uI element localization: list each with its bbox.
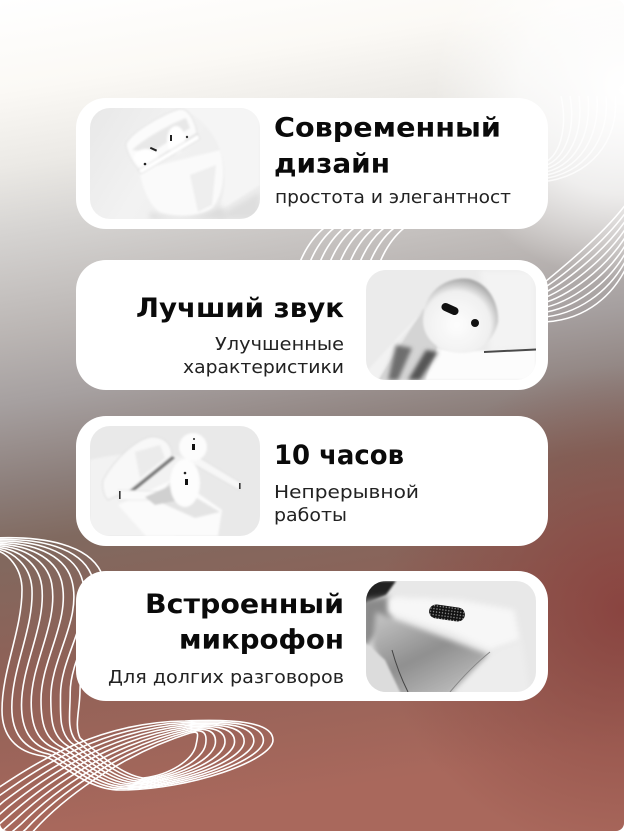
- subtitle: Для долгих разговоров: [108, 667, 344, 688]
- card background: [76, 260, 548, 390]
- photo: open case with earbuds: [90, 108, 260, 219]
- subtitle: Непрерывной: [274, 482, 419, 503]
- photo: earbud close-up: [366, 270, 536, 380]
- subtitle: [276, 484, 418, 524]
- subtitle: Улучшенные: [215, 334, 344, 355]
- subtitle: характеристики: [183, 357, 344, 378]
- panel: built-in microphone: [76, 571, 548, 701]
- heading: Современный: [274, 112, 501, 144]
- panel: modern design: [76, 98, 548, 229]
- heading: Встроенный: [145, 589, 344, 620]
- subtitle: работы: [274, 505, 347, 526]
- line art: bottom-left looping ribbon: [0, 538, 273, 831]
- heading: 10 часов: [274, 440, 404, 471]
- panel: 10 hours: [76, 416, 548, 546]
- line art: faint arcs top right: [548, 142, 596, 182]
- panel: modern design: дизайн: [274, 148, 390, 180]
- card background: [76, 571, 548, 701]
- panel: best sound: [76, 260, 548, 390]
- subtitle: [184, 337, 343, 376]
- card background: [76, 416, 548, 546]
- subtitle: простота и элегантност: [275, 187, 511, 208]
- line art: right ribbon: [540, 204, 624, 322]
- line art: arcs between first two cards: [300, 228, 404, 262]
- photo: microphone mesh close-up: [362, 581, 536, 696]
- photo: case with two earbuds: [90, 426, 260, 536]
- panel: built-in microphone: микрофон: [179, 624, 344, 656]
- heading: Лучший звук: [136, 293, 344, 324]
- card background: [76, 98, 548, 229]
